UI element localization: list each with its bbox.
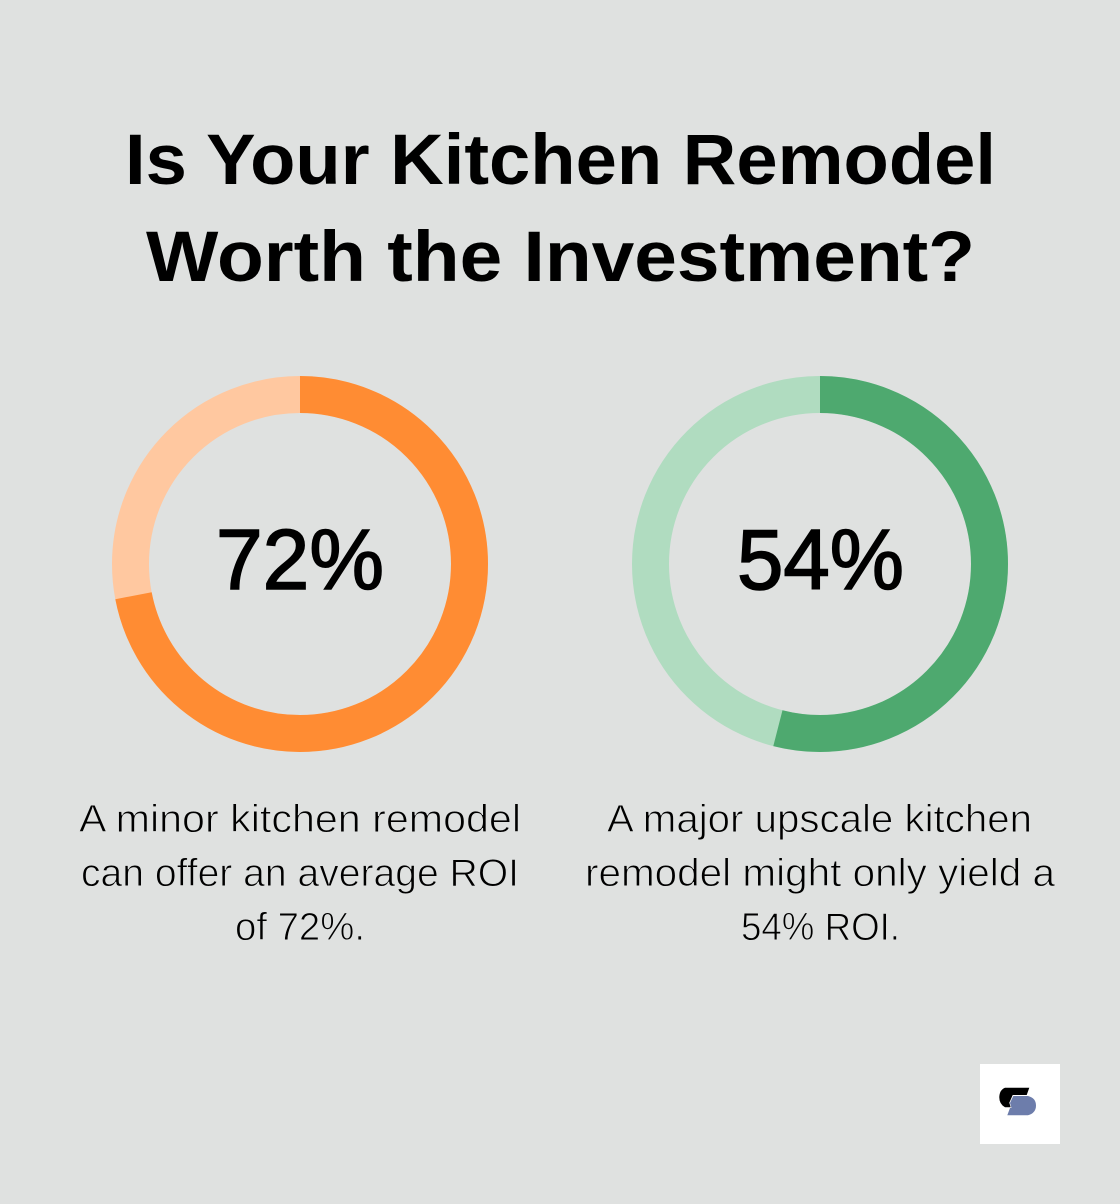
donut chart: 54%	[650, 394, 990, 734]
panel: minor remodel	[79, 394, 521, 949]
panel: major remodel	[585, 394, 1055, 949]
description: minor remodel: of 72%.	[235, 906, 365, 949]
donut chart: 72%	[130, 394, 470, 734]
donut chart: 72%: 72%	[216, 513, 384, 608]
description: minor remodel: A minor kitchen remodel	[79, 798, 521, 841]
description: major remodel: remodel might only yield a	[585, 852, 1055, 895]
donut chart: 54%: 54%	[737, 513, 904, 608]
description: major remodel: 54% ROI.	[741, 906, 900, 949]
description: major remodel	[585, 798, 1055, 949]
title: Is Your Kitchen Remodel	[125, 121, 996, 200]
description: minor remodel	[79, 798, 521, 949]
title	[125, 121, 996, 297]
description: minor remodel: can offer an average ROI	[81, 852, 519, 895]
description: major remodel: A major upscale kitchen	[607, 798, 1032, 841]
logo	[980, 1064, 1060, 1144]
title: Worth the Investment?	[146, 218, 975, 297]
